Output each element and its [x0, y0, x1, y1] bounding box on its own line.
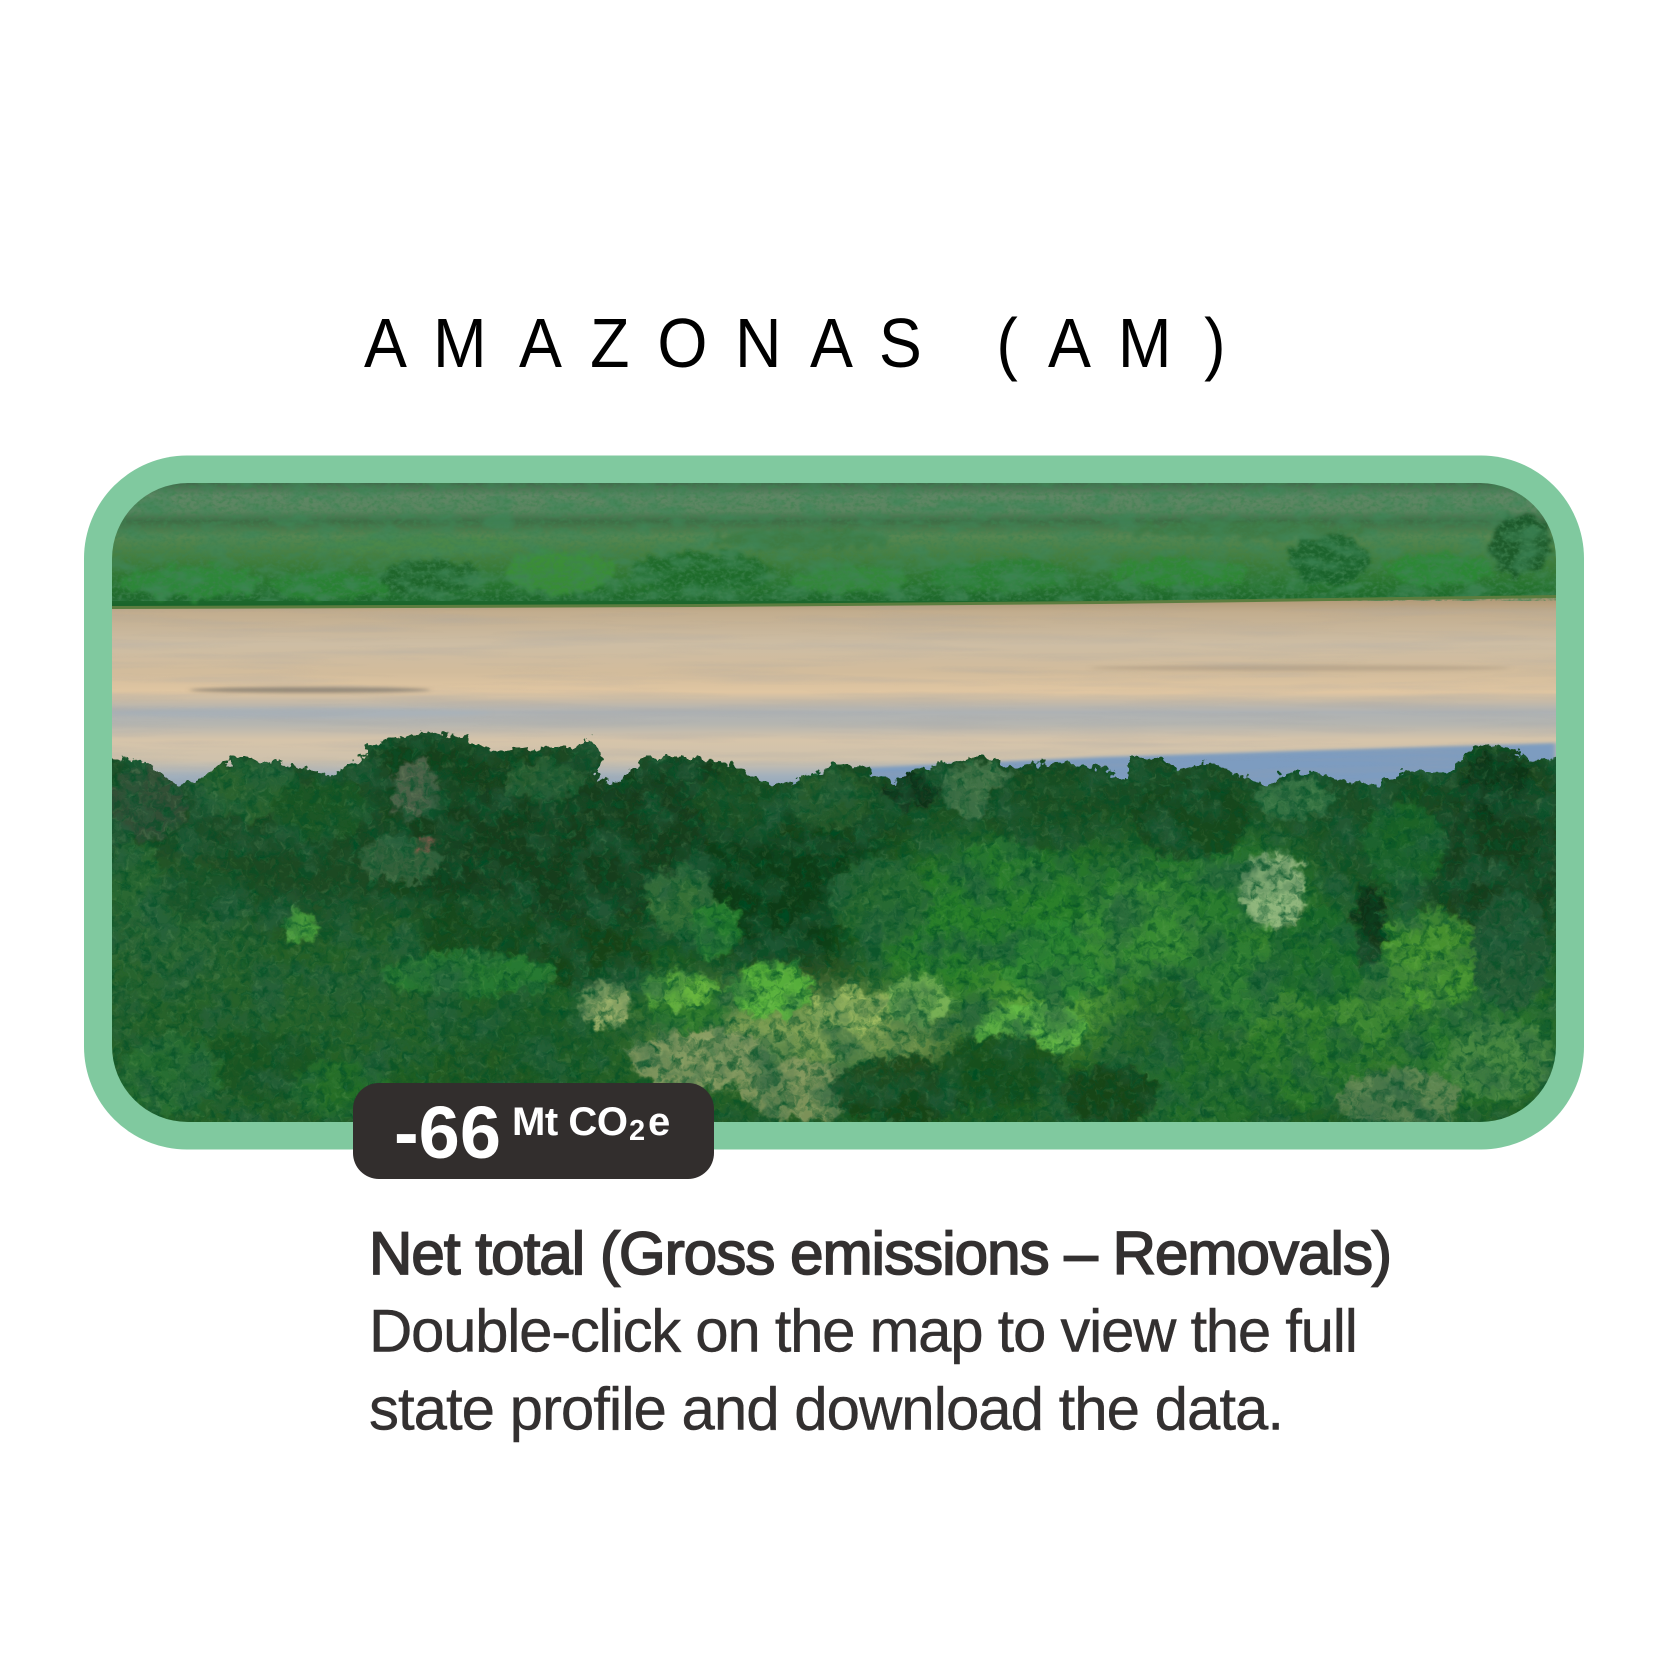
value badge	[353, 1083, 714, 1179]
photo: Amazon river and rainforest	[60, 483, 1580, 1140]
body text	[369, 1298, 1358, 1442]
title: AMAZONAS (AM)	[364, 305, 1226, 383]
value: -66	[394, 1091, 501, 1174]
unit: 2	[629, 1115, 645, 1147]
heading line: Net total (Gross emissions – Removals)	[369, 1220, 1392, 1287]
unit: Mt CO	[512, 1100, 628, 1144]
tree crowns	[109, 737, 1555, 1135]
body text: state profile and download the data.	[369, 1376, 1284, 1442]
river	[110, 590, 1556, 820]
distant forest	[112, 483, 1556, 609]
unit	[512, 1100, 670, 1147]
photo frame	[84, 456, 1584, 1150]
canopy colour regions	[60, 760, 1580, 1130]
body text: Double-click on the map to view the full	[369, 1298, 1358, 1364]
foreground forest	[60, 730, 1580, 1140]
infographic canvas	[84, 316, 1584, 1442]
unit: e	[648, 1100, 670, 1144]
description	[369, 1220, 1392, 1442]
